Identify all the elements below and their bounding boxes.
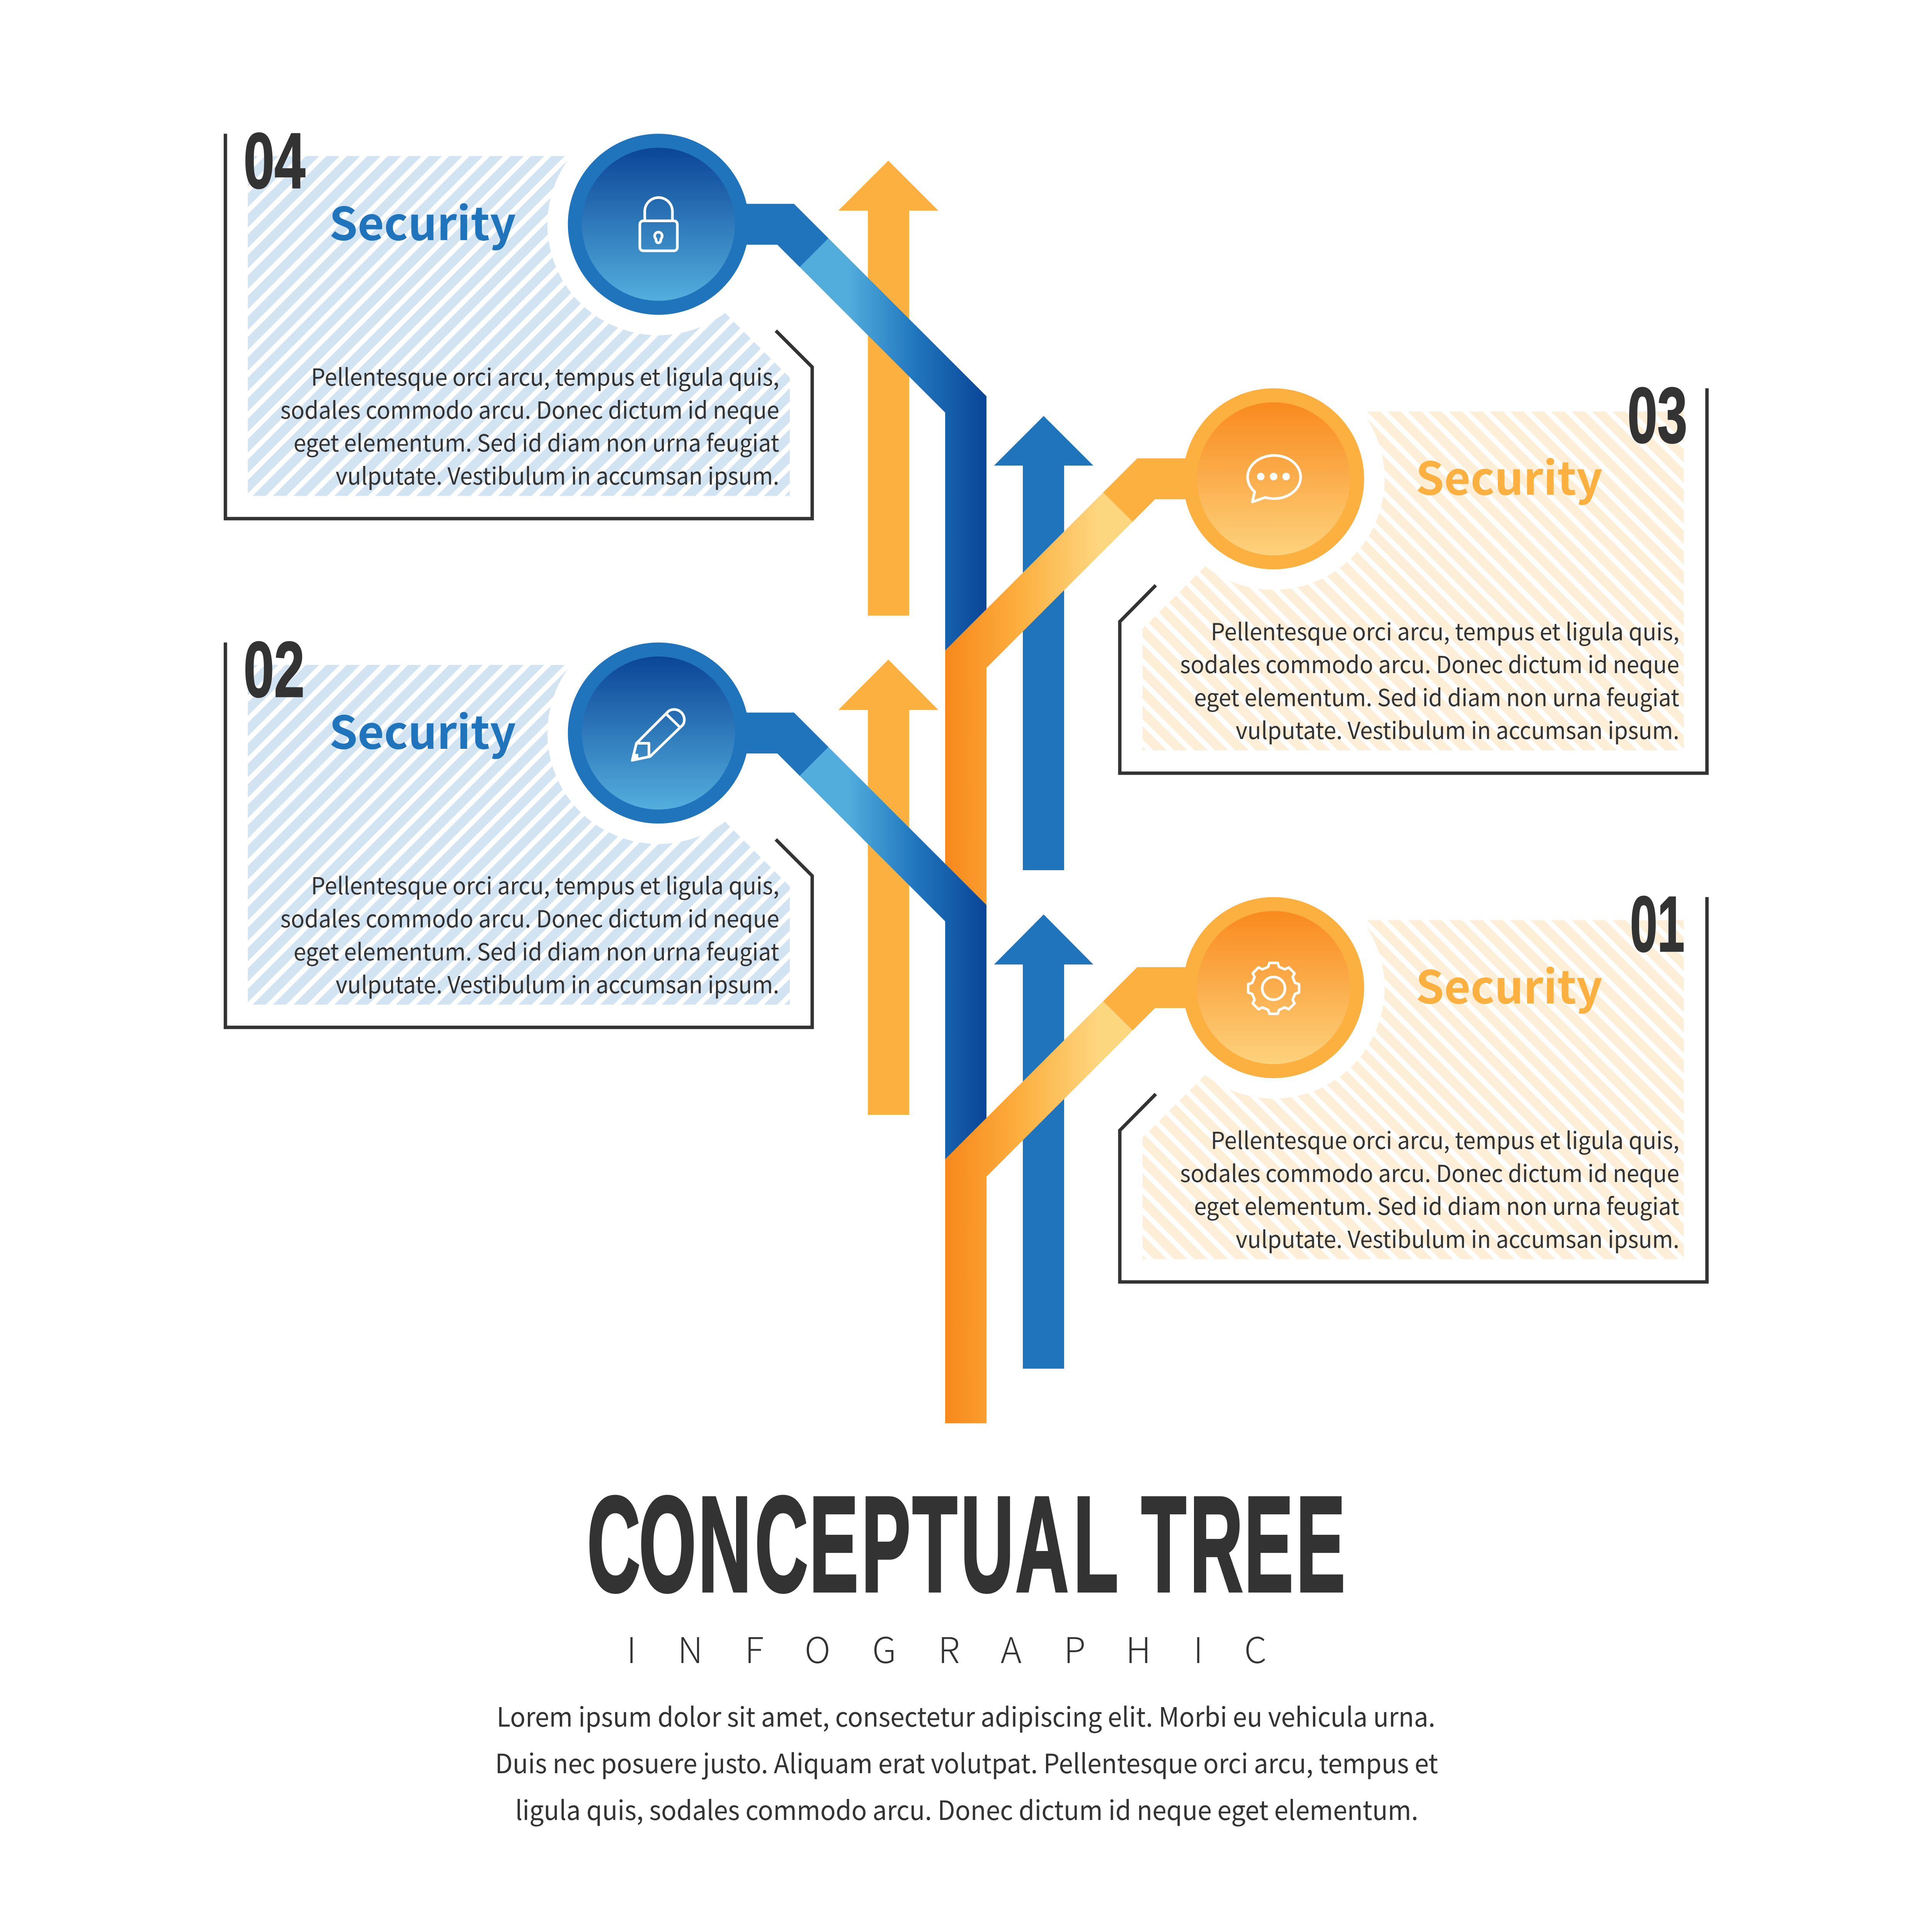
icon: step 04 circle with padlock [568,134,749,315]
text block: step 04: sodales commodo arcu. Donec dictum id neque [280,391,779,425]
text block: step 01: eget elementum. Sed id diam non urna feugiat [1194,1187,1679,1222]
text: number 02: 02 [243,626,304,714]
text block: step 01 [1180,1122,1679,1255]
branch: blue connector for step 02 [739,713,986,1160]
description paragraph: ligula quis, sodales commodo arcu. Donec dictum id neque eget elementum. [515,1789,1418,1828]
branch: blue connector for step 04 [739,204,986,651]
description paragraph [495,1696,1438,1828]
heading: step 02: Security [329,696,516,762]
icon: step 01 circle with gear [1183,897,1364,1078]
panel: step 02 background and frame [223,642,814,1029]
text block: step 01: sodales commodo arcu. Donec dictum id neque [1180,1155,1679,1189]
arrow: upper blue [994,416,1093,870]
heading: step 04: Security [329,188,516,253]
text block: step 03 [1180,613,1679,746]
icon: step 02 circle with pencil [568,643,749,823]
text block: step 04: Pellentesque orci arcu, tempus et ligula quis, [311,358,779,393]
description paragraph: Duis nec posuere justo. Aliquam erat volutpat. Pellentesque orci arcu, tempus et [495,1742,1438,1781]
heading: step 03: Security [1416,442,1602,508]
text block: step 02: vulputate. Vestibulum in accumsan ipsum. [336,966,779,1000]
text block: step 04: eget elementum. Sed id diam non urna feugiat [294,424,779,459]
text block: step 01: vulputate. Vestibulum in accumsan ipsum. [1236,1220,1679,1255]
text block: step 04 [280,358,779,492]
text block: step 02 [280,867,779,1000]
text: number 04: 04 [243,117,305,205]
text block: step 03: sodales commodo arcu. Donec dictum id neque [1180,646,1679,680]
text: number 01: 01 [1630,880,1685,968]
subtitle: INFOGRAPHIC [627,1622,1267,1673]
branch: orange connector for step 03 [945,458,1189,907]
panel: step 04 background and frame [223,134,814,520]
text block: step 02: Pellentesque orci arcu, tempus et ligula quis, [311,867,779,901]
arrow: lower blue [994,915,1093,1369]
text block: step 03: vulputate. Vestibulum in accumsan ipsum. [1236,712,1679,746]
branch: orange connector for step 01 and trunk [945,967,1189,1423]
title: CONCEPTUAL TREE [587,1468,1345,1620]
icon: step 03 circle with speech bubble [1183,388,1364,570]
arrow: lower orange [838,660,938,1115]
panel: step 03 background and frame [1118,388,1709,775]
text block: step 03: Pellentesque orci arcu, tempus et ligula quis, [1211,613,1679,647]
text block: step 04: vulputate. Vestibulum in accumsan ipsum. [336,457,779,492]
text: number 03: 03 [1628,371,1687,459]
text block: step 03: eget elementum. Sed id diam non urna feugiat [1194,679,1679,713]
heading: step 01: Security [1416,951,1602,1017]
description paragraph: Lorem ipsum dolor sit amet, consectetur adipiscing elit. Morbi eu vehicula urna. [497,1696,1435,1735]
arrow: upper orange [838,161,938,616]
text block: step 02: eget elementum. Sed id diam non urna feugiat [294,933,779,967]
text block: step 01: Pellentesque orci arcu, tempus et ligula quis, [1211,1122,1679,1156]
text block: step 02: sodales commodo arcu. Donec dictum id neque [280,900,779,934]
panel: step 01 background and frame [1118,897,1709,1284]
